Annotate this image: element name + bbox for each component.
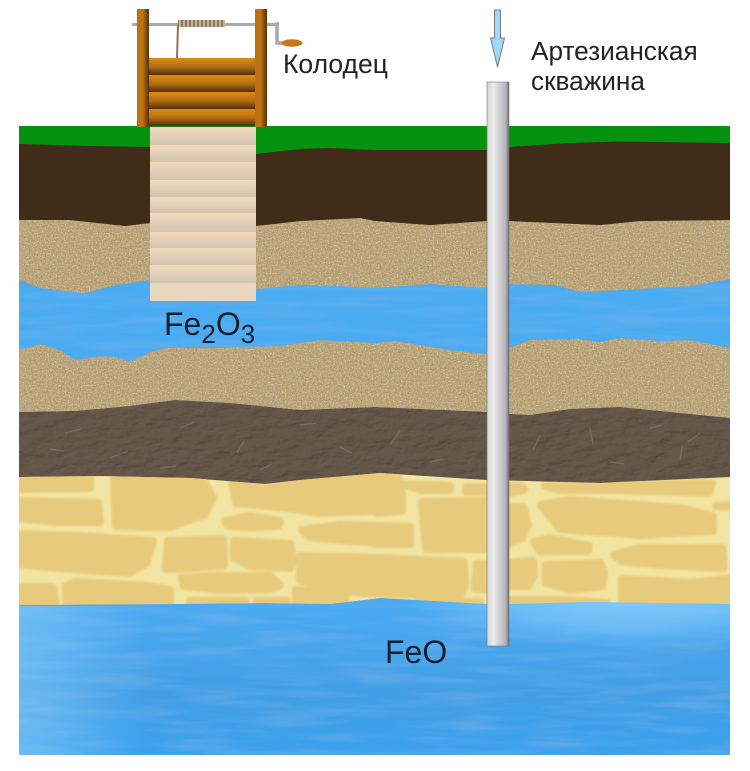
well shaft — [150, 127, 256, 301]
layer: dark soil — [19, 142, 730, 240]
left post — [137, 9, 149, 127]
borehole label: Артезианская — [531, 36, 698, 66]
rope coil — [178, 20, 225, 27]
layer: yellow flagstone — [16, 470, 734, 615]
layer: upper sand — [19, 218, 730, 310]
label: Fe2O3: 2 — [201, 319, 216, 349]
flagstone blocks — [16, 474, 734, 610]
label: FeO: FeO — [385, 634, 447, 670]
layer: deep water aquifer — [19, 598, 730, 755]
rock scratches — [50, 422, 700, 470]
borehole label: скважина — [531, 66, 645, 96]
arrow: water flow into borehole — [490, 10, 504, 67]
layer: upper water aquifer — [19, 279, 730, 370]
label: Fe2O3: Fe — [164, 306, 201, 342]
crank handle — [277, 22, 284, 43]
layer: lower sand — [19, 338, 730, 430]
well label: Колодец — [283, 49, 388, 79]
right post — [255, 9, 267, 127]
layer: dark stone — [19, 400, 730, 490]
borehole pipe — [487, 82, 509, 646]
label: Fe2O3: O — [216, 306, 241, 342]
crank grip — [282, 39, 302, 47]
label: Fe2O3: 3 — [241, 319, 255, 349]
layer: grass — [19, 126, 730, 156]
well frame — [132, 9, 302, 127]
log wall — [148, 58, 256, 126]
rope — [177, 25, 178, 58]
windlass axle — [132, 23, 279, 26]
